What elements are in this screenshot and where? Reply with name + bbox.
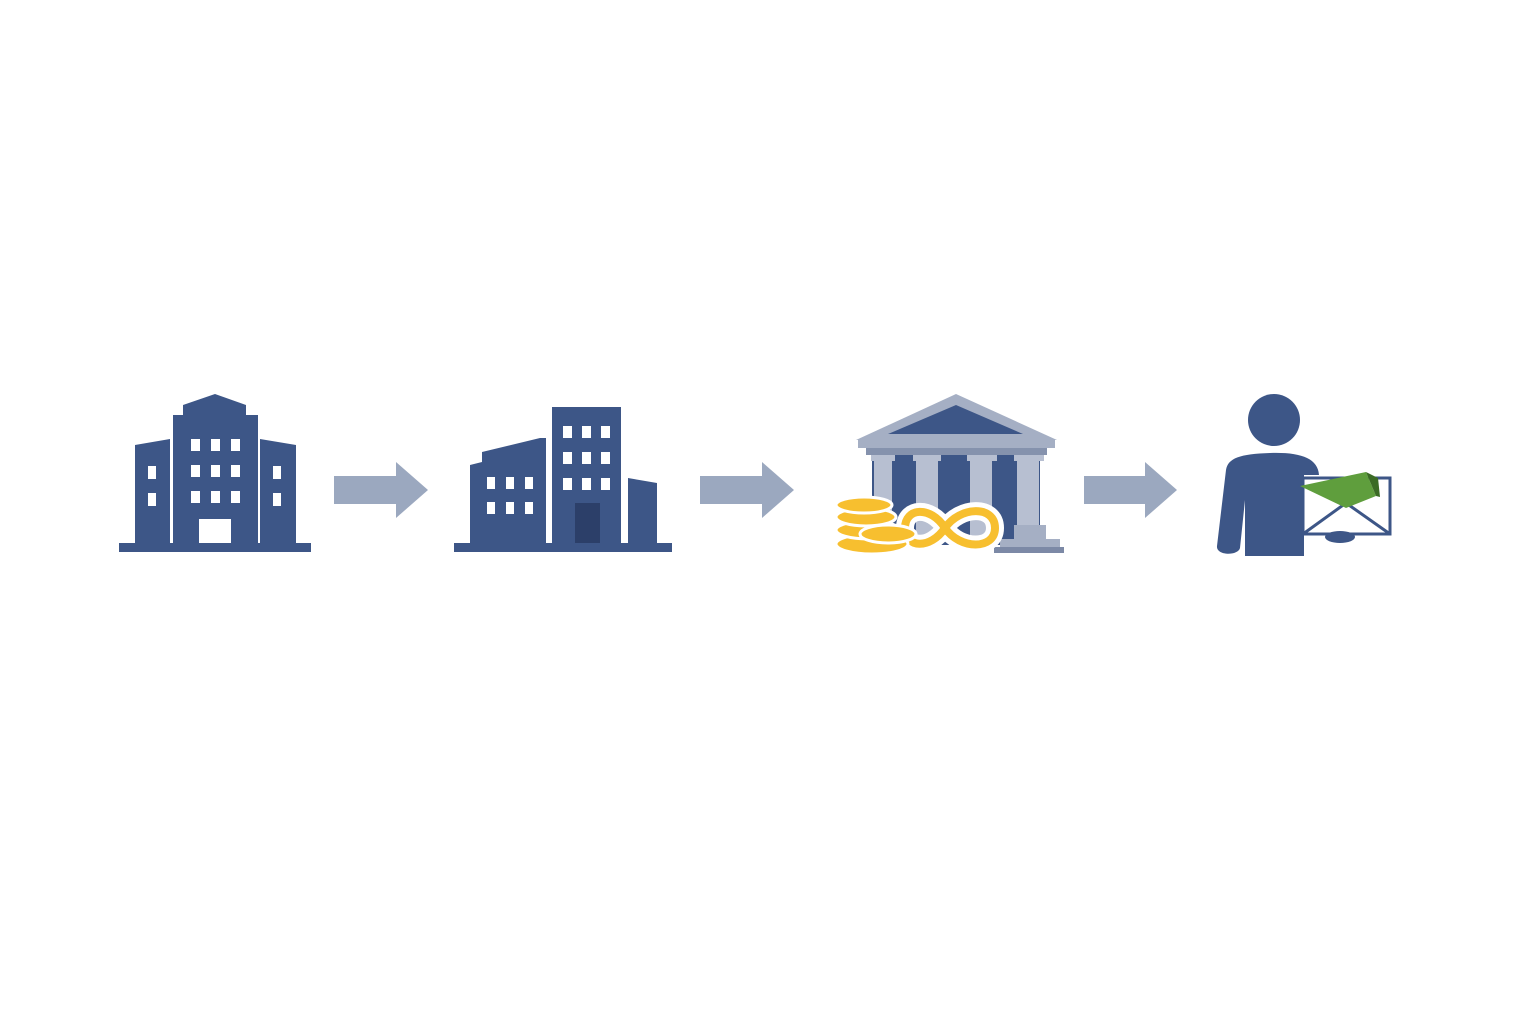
arrow 1 (334, 462, 428, 518)
coins (836, 497, 916, 554)
icon: office building 1 (119, 394, 311, 552)
icon: person with envelope (1217, 394, 1390, 556)
icon: office building 2 (454, 407, 672, 552)
arrow 3 (1084, 462, 1177, 518)
icon: bank with coins and infinity (836, 394, 1064, 554)
infinity (905, 511, 995, 544)
arrow 2 (700, 462, 794, 518)
